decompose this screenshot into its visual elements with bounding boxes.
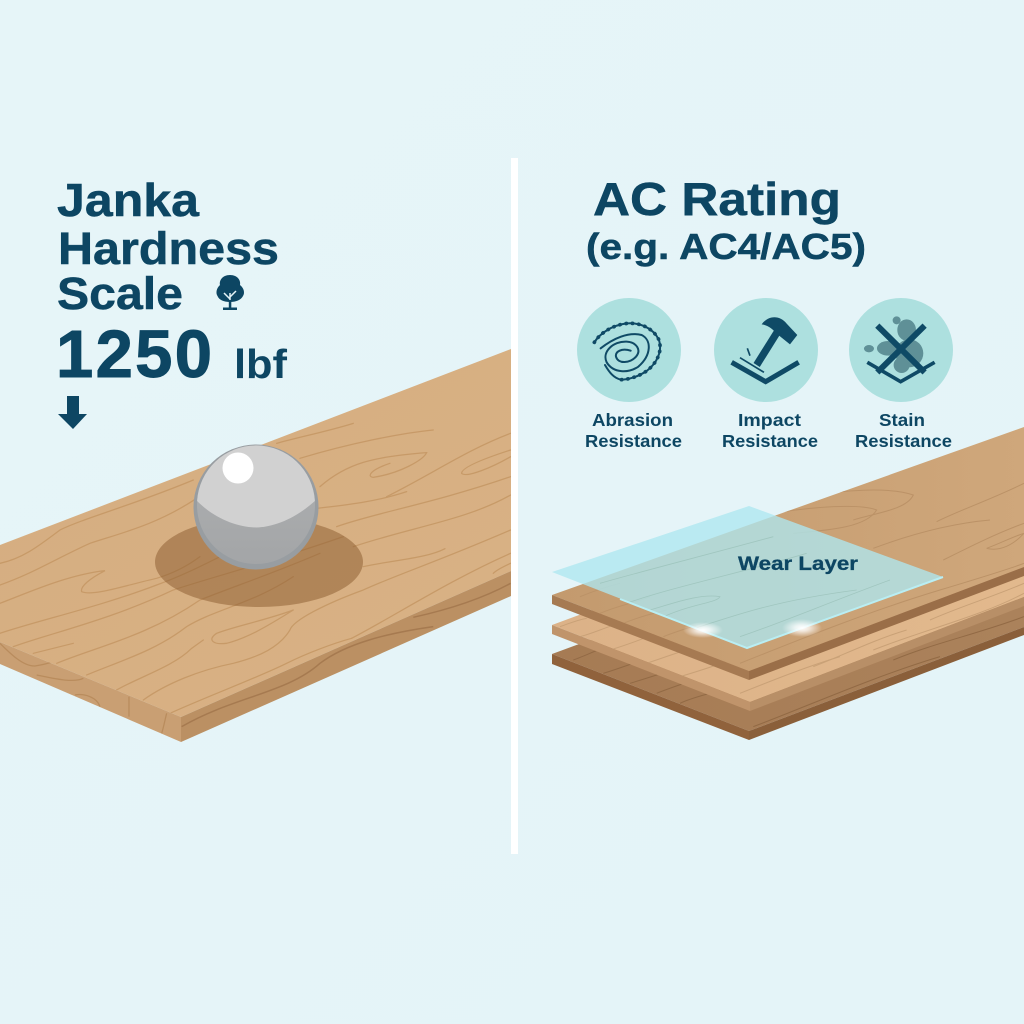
panel: Janka hardness [0,174,511,742]
layered planks [552,427,1024,740]
steel ball [194,444,318,570]
icon: impact resistance [714,298,818,402]
hardness value: 1250 [56,317,212,392]
bottom plank [552,597,1024,740]
center divider [511,158,518,854]
wear layer label: Wear Layer [738,553,858,575]
heading: AC Rating [586,173,866,267]
top plank [552,427,1024,680]
heading: Janka Hardness Scale [57,174,279,319]
label: impact resistance: Impact [738,410,801,430]
hardness value: lbf [234,341,287,387]
wood plank with steel ball [0,349,511,742]
icon: down arrow [58,396,87,429]
icon: tree [216,275,244,310]
wear layer sheet [552,506,943,648]
heading: Janka Hardness Scale: Scale [57,268,183,319]
label: stain resistance [855,410,952,451]
label: abrasion resistance: Abrasion [592,410,673,430]
middle plank [552,567,1024,711]
heading: AC Rating: AC Rating [593,173,841,225]
panel: AC rating [552,173,1024,740]
icon: stain resistance [849,298,953,402]
wear layer glints [683,619,822,638]
label: stain resistance: Resistance [855,431,952,451]
heading: Janka Hardness Scale: Hardness [58,223,279,274]
label: stain resistance: Stain [879,410,925,430]
label: abrasion resistance [585,410,682,451]
icon: abrasion resistance [577,298,681,402]
label: abrasion resistance: Resistance [585,431,682,451]
ball shadow [155,517,363,607]
hardness value [56,317,287,392]
label: impact resistance [722,410,818,451]
label: impact resistance: Resistance [722,431,818,451]
heading: Janka Hardness Scale: Janka [57,174,199,226]
heading: AC Rating: (e.g. AC4/AC5) [586,226,866,267]
